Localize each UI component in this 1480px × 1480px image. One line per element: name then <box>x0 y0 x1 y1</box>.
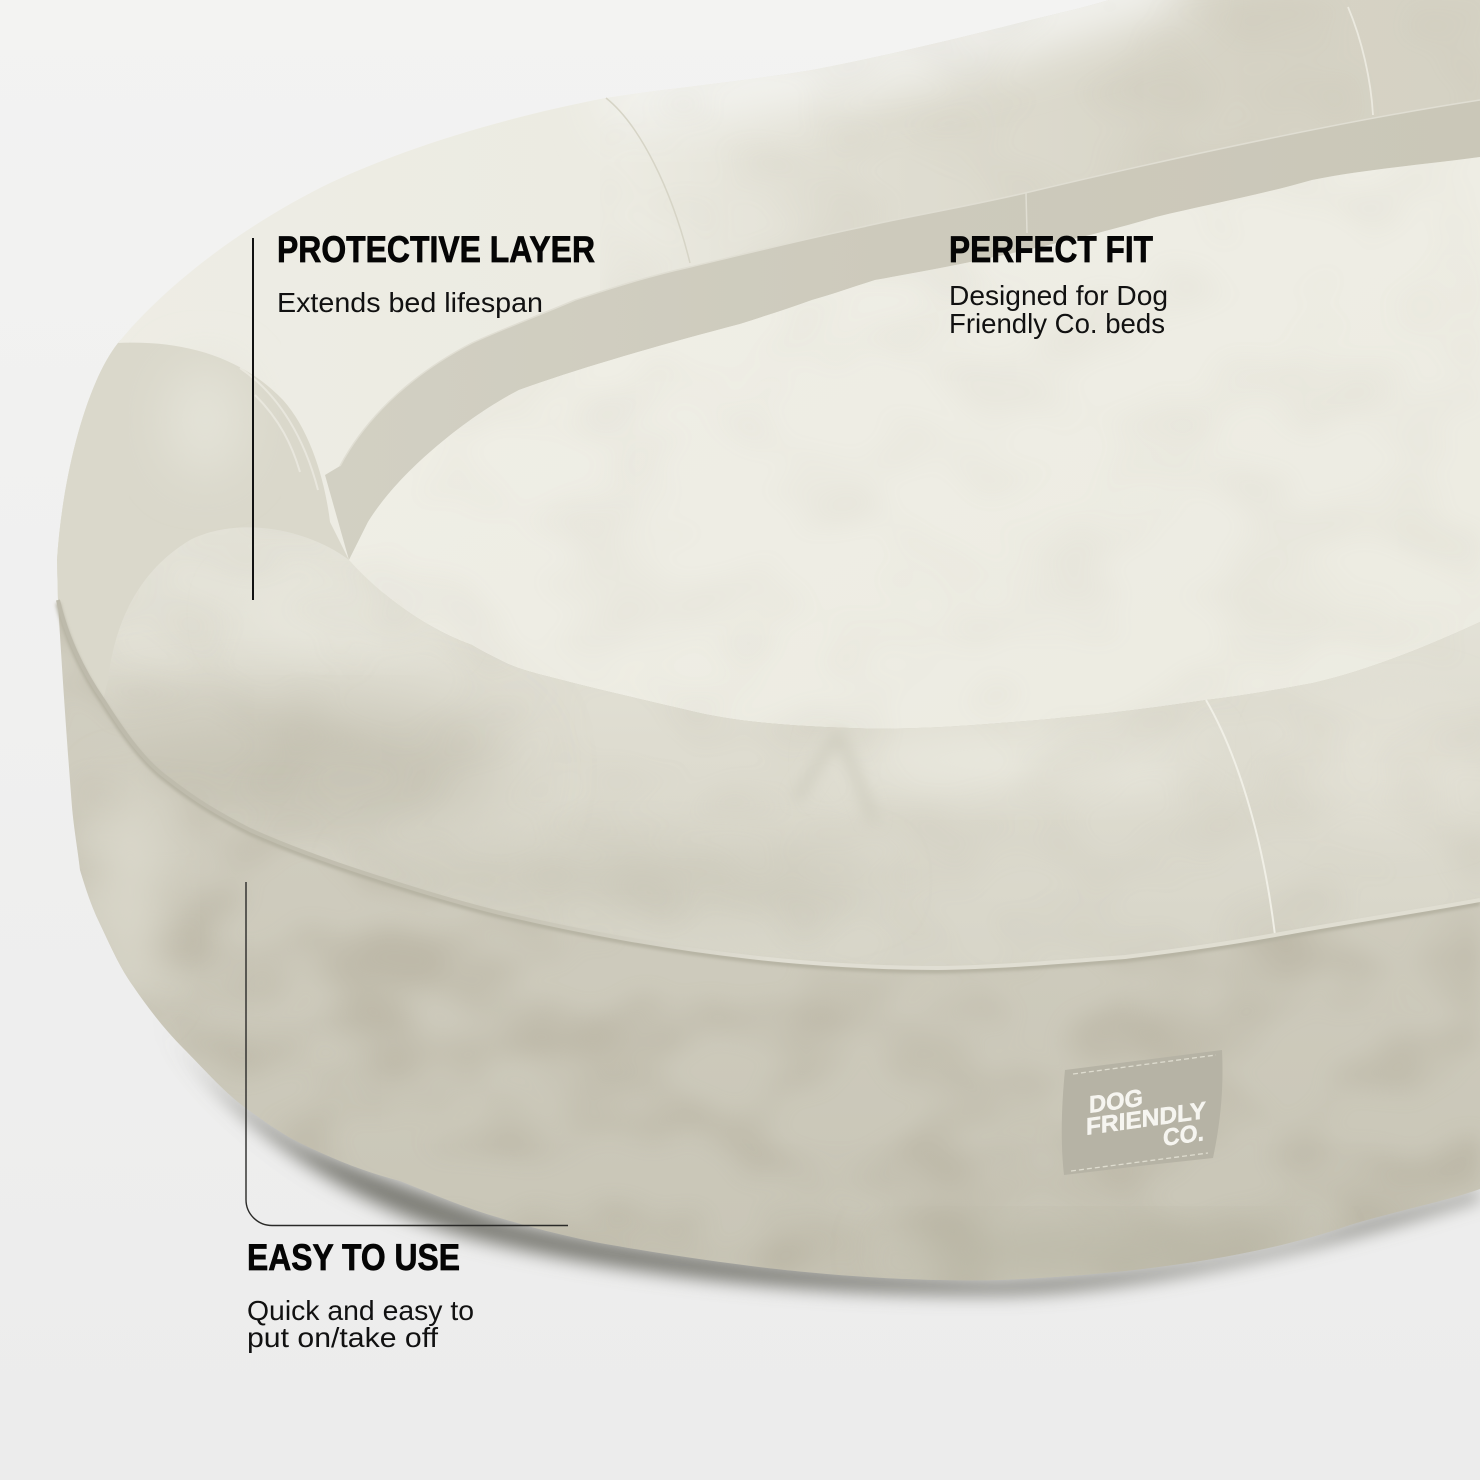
front bolster dimple <box>796 733 874 822</box>
fold mottling <box>167 365 243 475</box>
label text: DOG <box>1089 1085 1143 1119</box>
piping shadow <box>58 603 1480 971</box>
callout: perfect fit <box>949 229 1168 339</box>
label text: CO. <box>1163 1119 1204 1152</box>
label patch <box>1062 1050 1223 1175</box>
heading: EASY TO USE <box>247 1237 460 1278</box>
heading: PROTECTIVE LAYER <box>277 229 595 270</box>
callout: protective layer <box>252 229 595 600</box>
label text <box>1086 1085 1206 1152</box>
bolster seam upper <box>606 98 690 263</box>
label stitching <box>1071 1055 1216 1171</box>
description: Quick and easy to <box>247 1295 474 1326</box>
leader line <box>246 882 568 1226</box>
gusset short seam <box>1026 193 1027 233</box>
description: Extends bed lifespan <box>277 287 543 318</box>
back bolster <box>0 0 1480 600</box>
inner gusset <box>325 100 1480 560</box>
brand label <box>1062 1050 1223 1175</box>
heading: PERFECT FIT <box>949 229 1153 270</box>
bed base and side wall <box>0 340 1480 1320</box>
front seam <box>1206 700 1275 935</box>
description line 2: put on/take off <box>247 1322 438 1353</box>
seat surface <box>340 140 1480 750</box>
label text: FRIENDLY <box>1086 1097 1206 1141</box>
left bolster end fold <box>57 343 349 700</box>
gusset piping <box>340 100 1480 466</box>
callout: easy to use <box>246 882 568 1353</box>
ground shadow <box>150 1010 1480 1294</box>
front bolster <box>106 528 1480 966</box>
fold creases <box>240 368 318 490</box>
bolster seam right <box>1348 7 1373 115</box>
description: Designed for Dog <box>949 280 1168 311</box>
description line 2: Friendly Co. beds <box>949 308 1165 339</box>
leader line <box>252 238 254 600</box>
piping <box>58 600 1480 968</box>
